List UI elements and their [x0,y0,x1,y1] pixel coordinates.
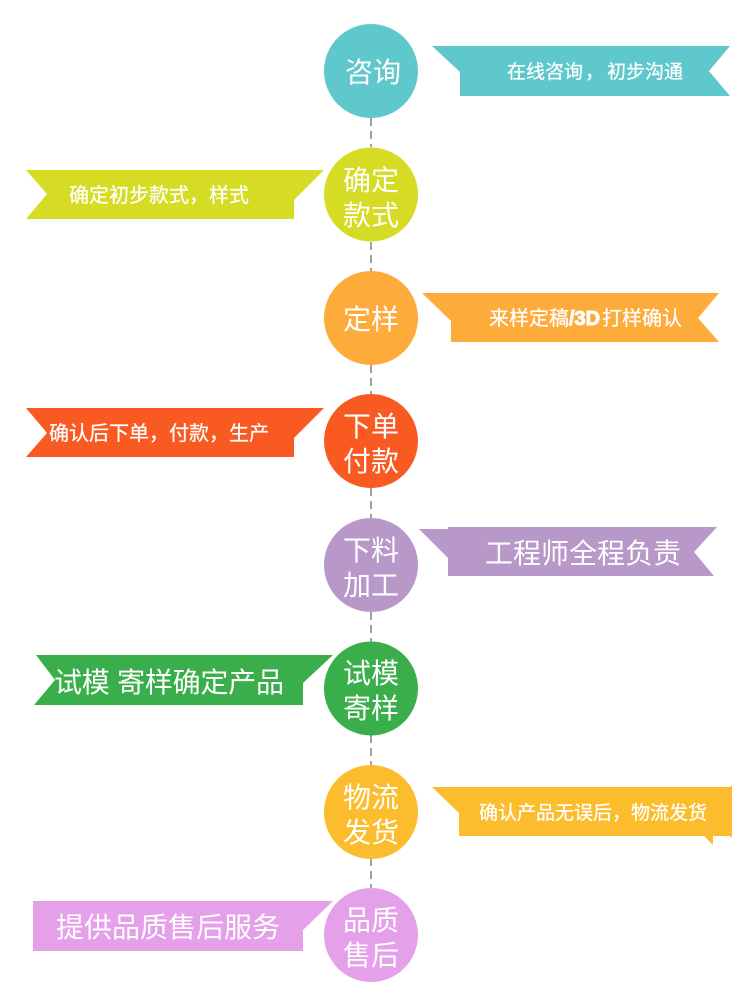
circle: 物流发货: 物流 [343,782,399,813]
ribbon: sample and 3D proof [422,293,719,342]
circle: 试模寄样 [324,642,418,736]
step 3: sample [324,271,719,365]
ribbon: engineer in charge [419,527,717,576]
circle: 下单付款 [324,394,418,488]
circle: 下单付款: 付款 [343,446,399,477]
circle: 品质售后: 品质 [343,905,399,936]
ribbon: confirm preliminary style [26,170,324,219]
ribbon: confirm and ship [432,785,732,845]
circle: 确定款式: 确定 [343,165,399,196]
ribbon: quality after-sales service: 提供品质售后服务 [56,912,280,943]
step 5: machining [324,518,717,612]
ribbon: online consultation [432,46,730,96]
circle: 下单付款: 下单 [343,411,399,442]
ribbon: confirm and ship: 确认产品无误后，物流发货 [479,802,707,824]
ribbon: sample and 3D proof: 来样定稿/3D [489,308,600,330]
circle: 下料加工: 加工 [343,570,399,601]
circle: 确定款式 [324,148,418,242]
step 7: logistics [324,765,732,859]
circle: 物流发货 [324,765,418,859]
step 6: trial mold [34,642,418,736]
circle: 试模寄样: 寄样 [343,693,399,724]
ribbon: engineer in charge: 工程师全程负责 [485,538,681,569]
circle: 确定款式: 款式 [343,200,399,231]
circle: 咨询: 咨询 [345,57,401,88]
circle: 定样 [324,271,418,365]
circle: 下料加工 [324,518,418,612]
circle: 咨询 [324,24,418,118]
step 4: order and payment [26,394,418,488]
ribbon: order, pay, produce [26,408,324,457]
circle: 试模寄样: 试模 [343,658,399,689]
ribbon: sample and 3D proof: 打样确认 [602,307,682,330]
step 2: confirm style [26,148,418,242]
ribbon: trial mold, sample, confirm product: 试模 寄样确定产品 [54,667,284,698]
circle: 物流发货: 发货 [343,817,399,848]
ribbon: online consultation: 初步沟通 [607,61,683,83]
circle: 定样: 定样 [343,304,399,335]
ribbon: online consultation: 在线咨询 [507,62,583,83]
ribbon: order, pay, produce: 确认后下单，付款，生产 [49,422,269,445]
ribbon: online consultation: ， [585,62,604,83]
timeline connector [370,118,372,888]
circle: 下料加工: 下料 [343,535,399,566]
ribbon: trial mold, sample, confirm product [34,655,333,705]
step 8: after-sales [33,888,418,982]
ribbon: quality after-sales service [33,901,333,951]
step 1: consult [324,24,730,118]
circle: 品质售后 [324,888,418,982]
ribbon: confirm preliminary style: 确定初步款式，样式 [69,184,249,207]
circle: 品质售后: 售后 [343,940,399,971]
